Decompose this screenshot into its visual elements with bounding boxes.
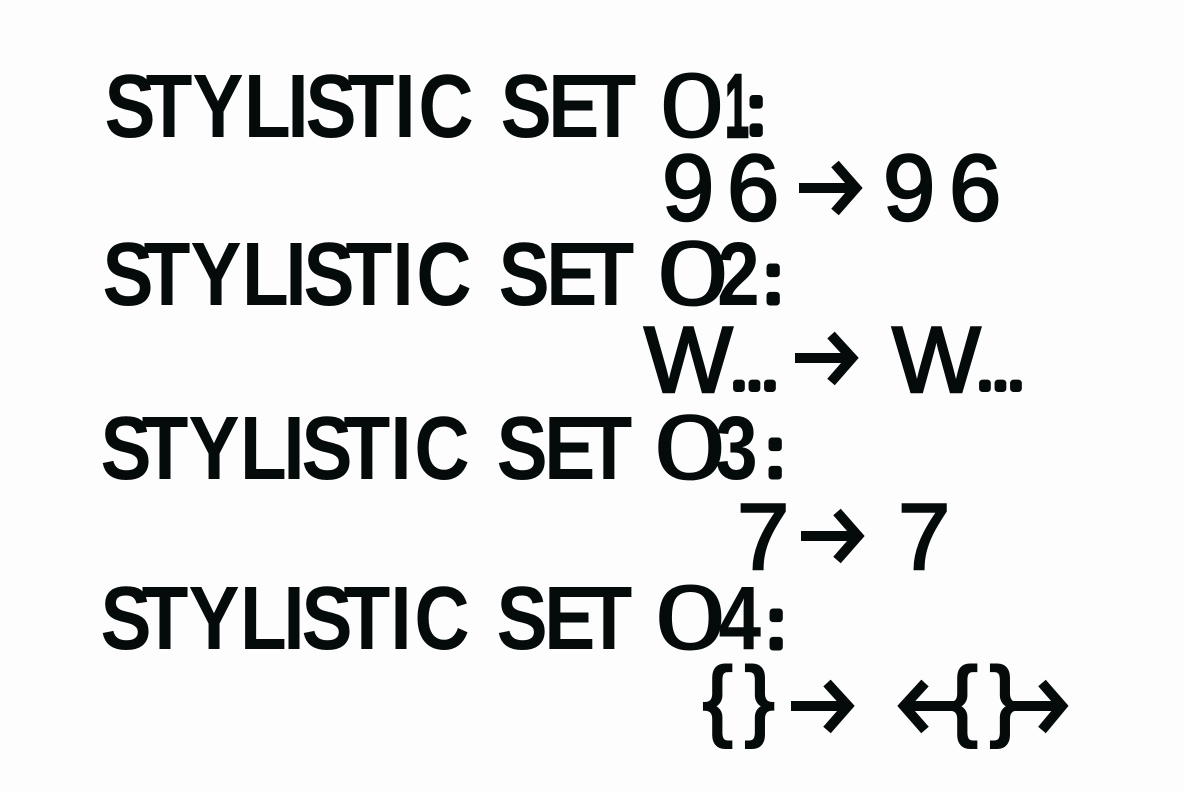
example: 7 to alternate 7: 7 (737, 484, 789, 589)
heading: stylistic set 04: STYLISTIC SET (101, 567, 632, 668)
example: W to alternate W: W (644, 307, 733, 412)
example: braces to arrowed braces (703, 649, 1062, 748)
heading: stylistic set 03: STYLISTIC SET (101, 397, 632, 498)
example: braces to arrowed braces: } (745, 649, 774, 748)
heading: stylistic set 03: 3 (715, 397, 758, 498)
heading: stylistic set 04: 0 (655, 567, 726, 669)
heading: stylistic set 02: : (764, 242, 782, 316)
example: 96 to alternate 96: 9 (662, 135, 714, 240)
heading: stylistic set 01: STYLISTIC SET (105, 55, 636, 156)
arrow (791, 683, 848, 730)
example: 96 to alternate 96 (662, 135, 1001, 240)
heading: stylistic set 02: STYLISTIC SET (103, 223, 634, 324)
example: W to alternate W: ... (732, 344, 778, 400)
heading: stylistic set 04: : (767, 587, 785, 661)
heading: stylistic set 02: 0 (657, 222, 729, 325)
heading: stylistic set 04: 4 (719, 567, 761, 668)
example: braces to arrowed braces: { (703, 649, 732, 748)
example: 96 to alternate 96: 6 (949, 135, 1001, 240)
example: W to alternate W: W (892, 307, 981, 412)
example: 96 to alternate 96: 6 (727, 135, 779, 240)
arrow (801, 512, 858, 560)
heading: stylistic set 03: : (766, 416, 784, 490)
example: braces to arrowed braces: { (948, 649, 977, 748)
heading: stylistic set 01: 0 (660, 55, 724, 157)
heading: stylistic set 03: 0 (654, 396, 726, 499)
heading: stylistic set 01: : (747, 74, 765, 148)
example: 7 to alternate 7 (737, 484, 950, 589)
arrow: left from brace (904, 683, 955, 730)
arrow: right from brace (1010, 683, 1062, 730)
example: 7 to alternate 7: 7 (898, 484, 950, 589)
example: braces to arrowed braces: } (990, 649, 1019, 748)
example: 96 to alternate 96: 9 (883, 135, 935, 240)
example: W to alternate W: ... (978, 344, 1024, 400)
heading: stylistic set 02: 2 (717, 223, 760, 324)
arrow (799, 164, 856, 212)
heading: stylistic set 01: 1 (725, 55, 749, 156)
example: W to alternate W (644, 307, 1024, 412)
arrow (795, 335, 852, 382)
